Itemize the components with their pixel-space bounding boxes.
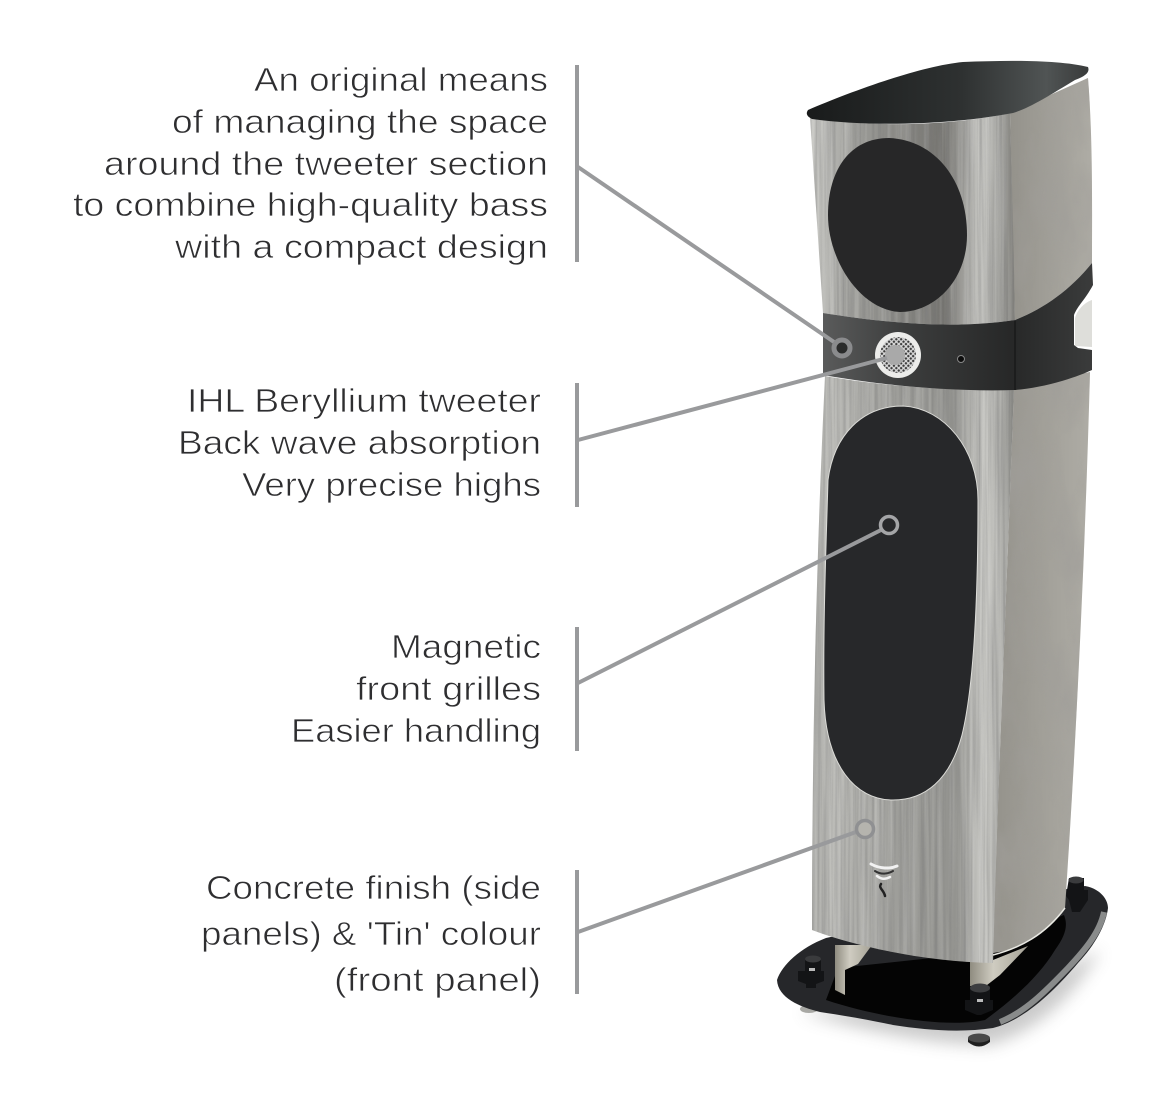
callout 1 text: tweeter section: of managing the space — [172, 103, 548, 140]
callout 1 leader — [575, 65, 850, 356]
glass top — [807, 61, 1088, 124]
black reflection in base — [826, 915, 1066, 1023]
rear support posts — [835, 945, 872, 995]
callout 1 text: tweeter section: with a compact design — [174, 228, 548, 265]
floor shadow — [800, 950, 1100, 1045]
loudspeaker illustration — [777, 61, 1108, 1046]
concrete upper texture — [1070, 78, 1090, 104]
callout 4 text: finish: Concrete finish (side — [206, 869, 541, 906]
lower cabinet front panel — [812, 376, 1014, 963]
callout 4 text: finish: (front panel) — [334, 961, 541, 998]
callout 2 leader — [575, 358, 887, 507]
lower grille — [824, 406, 978, 800]
callout 1 text: tweeter section: around the tweeter section — [104, 145, 548, 182]
callout 2 text: beryllium tweeter — [178, 382, 541, 503]
brushed finish texture — [808, 370, 1018, 970]
upper cabinet front — [810, 113, 1015, 325]
rear tweeter mount — [1075, 300, 1092, 347]
band seam — [1014, 321, 1016, 390]
icon: small screw right — [958, 356, 964, 362]
callout 2 text: beryllium tweeter: Very precise highs — [242, 466, 541, 503]
icon: spike feet — [800, 1005, 990, 1046]
glass base plate — [777, 886, 1108, 1031]
upper cabinet side — [1010, 78, 1092, 320]
callout 4 text: finish — [201, 869, 541, 998]
icon: base bolts — [798, 876, 1088, 1015]
callout 2 text: beryllium tweeter: Back wave absorption — [178, 424, 541, 461]
callout 3 leader — [575, 516, 898, 751]
callout 1 text: tweeter section: An original means — [254, 61, 548, 98]
tweeter band — [823, 263, 1093, 390]
concrete texture — [990, 370, 1095, 960]
callout 3 text: front grilles: Magnetic — [391, 628, 541, 665]
icon: logo — [871, 864, 897, 896]
side panel edge — [993, 908, 1065, 955]
brushed finish upper texture — [808, 110, 1018, 330]
callout 1 text: tweeter section: to combine high-quality bass — [73, 186, 548, 223]
base highlight rim — [1000, 912, 1104, 1022]
callout 4 leader — [575, 820, 874, 994]
lower cabinet side — [993, 372, 1090, 953]
callout 2 text: beryllium tweeter: IHL Beryllium tweeter — [187, 382, 541, 419]
callout 1 text: tweeter section — [73, 61, 548, 265]
callout 4 text: finish: panels) & 'Tin' colour — [201, 915, 541, 952]
callout 3 text: front grilles: front grilles — [356, 670, 541, 707]
upper grille — [828, 138, 967, 312]
callout 3 text: front grilles — [291, 628, 541, 749]
tweeter — [875, 332, 921, 378]
callout 3 text: front grilles: Easier handling — [291, 712, 541, 749]
